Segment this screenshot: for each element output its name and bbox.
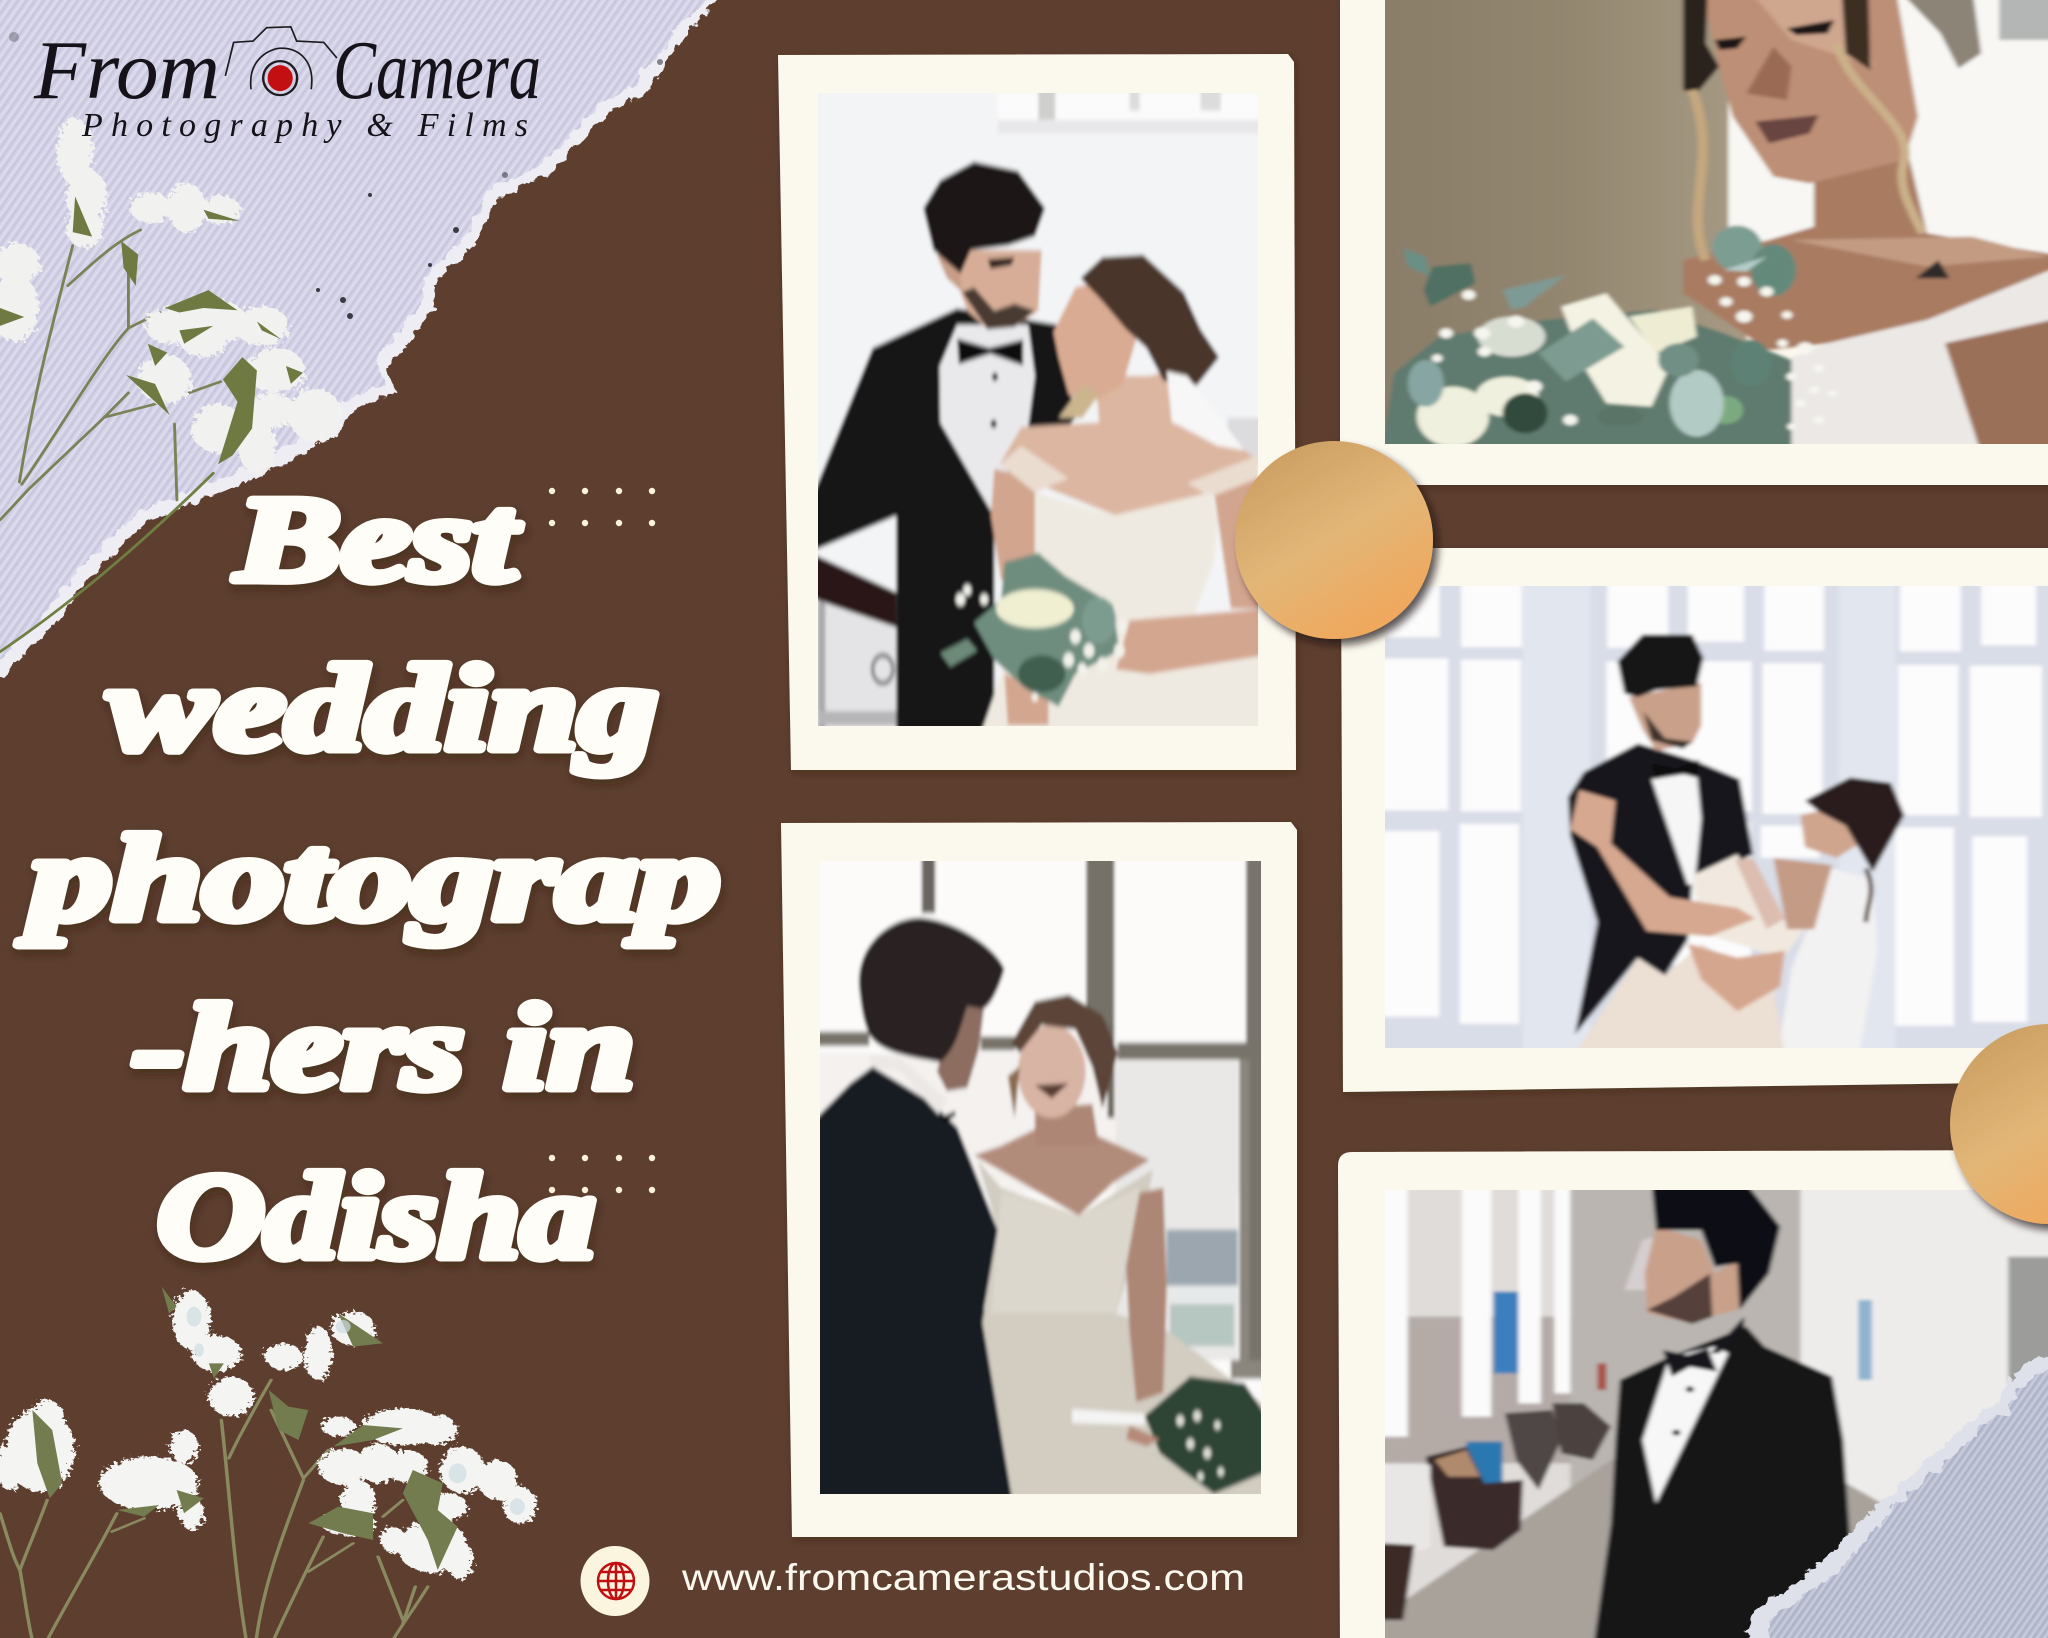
icon: camera xyxy=(225,27,337,95)
website link xyxy=(580,1546,1245,1616)
panel: photo frame 3 xyxy=(1340,0,2048,485)
bouquet xyxy=(974,553,1119,706)
photo: bride close-up with bouquet xyxy=(1381,0,2048,453)
panel: torn paper bottom right xyxy=(1744,1356,2048,1638)
photo: couple dancing by the windows xyxy=(1376,579,2048,1058)
title: photograp xyxy=(18,811,720,946)
panel: photo frame 2 xyxy=(781,822,1297,1537)
icon: flowers bottom left xyxy=(0,1287,537,1638)
logo wordmark: Camera xyxy=(333,24,541,117)
paper specks xyxy=(9,32,663,319)
logo wordmark: Photography & Films xyxy=(81,107,528,144)
dots top xyxy=(549,488,655,526)
icon: gold circle top xyxy=(1235,441,1433,639)
icon: globe badge xyxy=(580,1546,650,1616)
bouquet xyxy=(1145,1376,1266,1494)
logo wordmark xyxy=(33,24,541,144)
website address: www.fromcamerastudios.com xyxy=(681,1557,1245,1598)
photo: couple on the stairs xyxy=(808,83,1268,744)
photo: couple at the window xyxy=(808,853,1268,1514)
title: wedding xyxy=(108,641,658,776)
title: Odisha xyxy=(157,1149,595,1284)
logo wordmark: From xyxy=(33,24,220,117)
panel: torn paper top left xyxy=(0,0,717,678)
panel: photo frame 4 xyxy=(1341,548,2048,1092)
bouquet xyxy=(1381,310,1792,453)
logo xyxy=(33,24,541,144)
title xyxy=(18,472,720,1284)
panel: photo frame 5 xyxy=(1338,1150,2048,1638)
photo: groom in the corridor xyxy=(1378,1183,2048,1638)
icon: flowers top left xyxy=(0,118,342,652)
icon: gold circle right xyxy=(1950,1024,2048,1224)
title: Best xyxy=(233,472,520,607)
title: -hers in xyxy=(132,980,635,1115)
dots bottom xyxy=(549,1155,655,1193)
panel: photo frame 1 xyxy=(778,54,1296,770)
